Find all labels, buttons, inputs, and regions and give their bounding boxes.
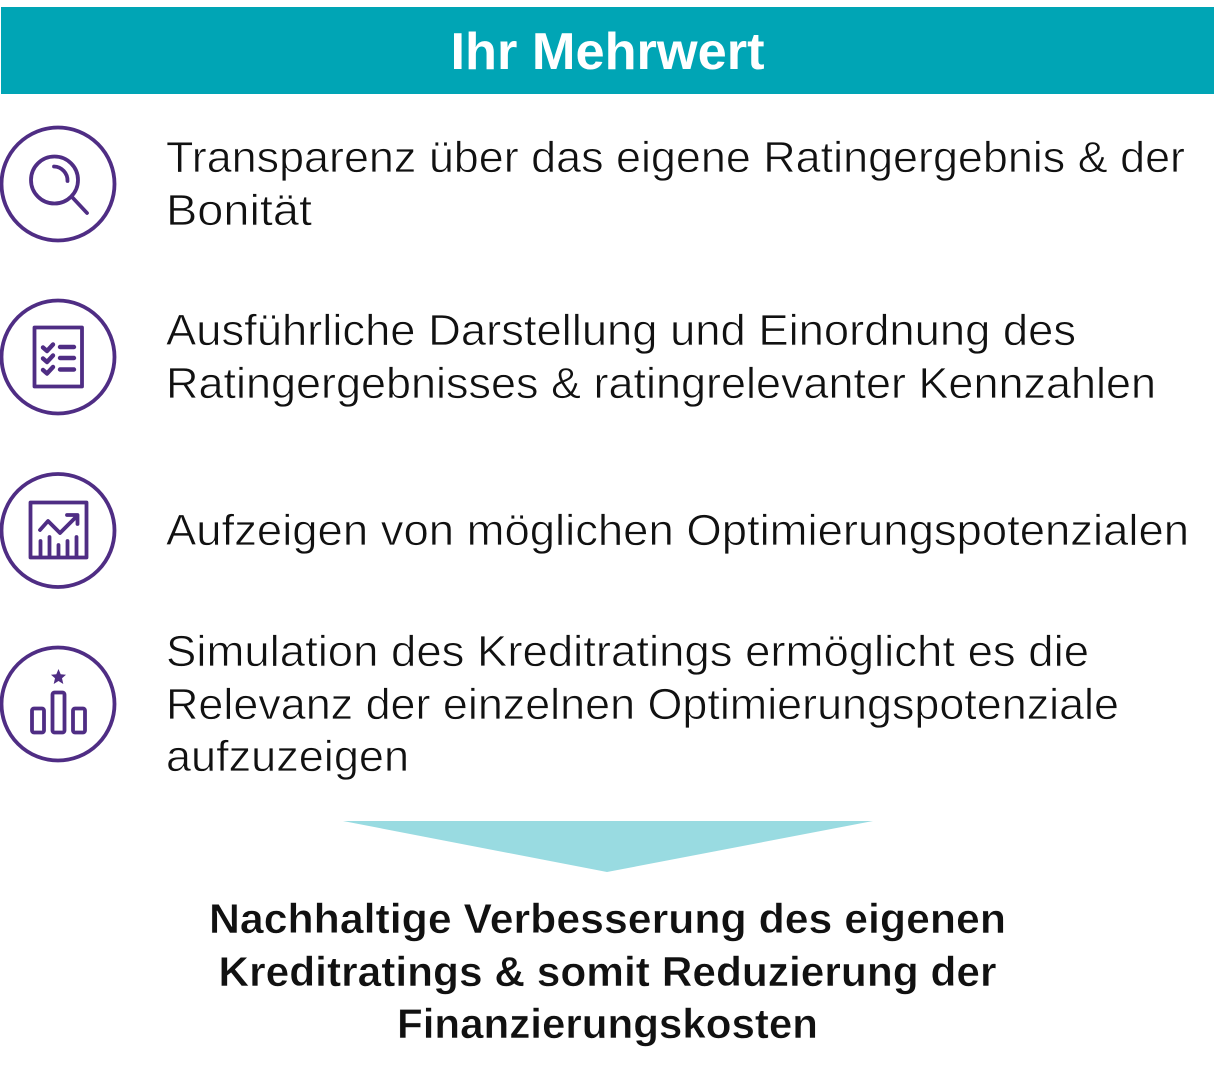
text: optimisation: Aufzeigen von möglichen Optimierungspotenzialen [166,506,1189,555]
text: simulation: aufzuzeigen [166,732,409,781]
icon: magnifying glass [2,128,114,240]
heading: Ihr Mehrwert [450,23,764,81]
text: transparency: Transparenz über das eigene Ratingergebnis & der [166,133,1185,182]
header banner [1,7,1214,94]
arrow [343,821,873,872]
conclusion text [209,895,1006,1047]
text: simulation: Simulation des Kreditratings ermöglicht es die [166,627,1089,676]
icon: checklist [2,300,114,414]
conclusion text: Nachhaltige Verbesserung des eigenen [209,895,1006,942]
text: detailed presentation [166,306,1156,408]
text: transparency: Bonität [166,186,312,235]
text: detailed presentation: Ratingergebnisses & ratingrelevanter Kennzahlen [166,359,1156,408]
text: simulation: Relevanz der einzelnen Optimierungspotenziale [166,680,1119,729]
conclusion text: Finanzierungskosten [397,1000,818,1047]
icon: chart [2,474,114,587]
text: simulation [166,627,1119,781]
conclusion text: Kreditratings & somit Reduzierung der [218,948,997,995]
icon: ranking bars with star [2,648,114,760]
text: transparency [166,133,1185,235]
text: detailed presentation: Ausführliche Darstellung und Einordnung des [166,306,1076,355]
